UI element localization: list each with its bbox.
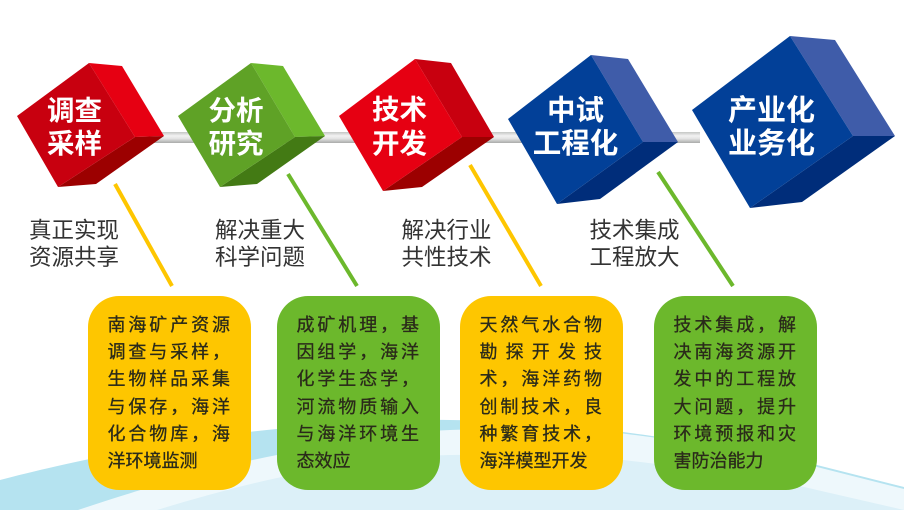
panel: 技术开发 details [460,296,623,490]
label: 解决行业共性技术 [402,218,492,270]
cube: 技术开发 [339,59,494,191]
panel: 中试工程化 details: 害防治能力 [674,451,764,471]
panel: 分析研究 details: 与海洋环境生 [296,424,419,444]
panel: 中试工程化 details: 大问题，提升 [674,397,796,417]
panel: 中试工程化 details: 发中的工程放 [674,369,796,389]
panel: 分析研究 details: 因组学，海洋 [296,342,419,362]
panel: 调查采样 details: 生物样品采集 [108,369,230,389]
cube: 中试工程化: 中试 [547,95,604,127]
cube: 中试工程化 [508,55,678,204]
cube: 调查采样: 调查 [47,95,102,126]
panel: 技术开发 details: 种繁育技术， [480,424,602,444]
label: 真正实现资源共享: 资源共享 [29,245,119,270]
cube: 中试工程化: 工程化 [533,128,618,160]
connecting gray bar [150,132,700,143]
panel: 中试工程化 details: 决南海资源开 [674,342,796,362]
label: 解决重大科学问题: 解决重大 [215,218,305,243]
panel: 调查采样 details: 洋环境监测 [108,451,198,471]
label: 技术集成工程放大: 工程放大 [590,245,680,270]
panel: 中试工程化 details: 环境预报和灾 [674,424,796,444]
panel: 调查采样 details: 与保存，海洋 [108,397,230,417]
panel: 调查采样 details: 调查与采样， [108,342,230,362]
panel: 调查采样 details: 化合物库，海 [108,424,230,444]
panel: 技术开发 details: 创制技术，良 [480,397,602,417]
cube: 调查采样 [17,63,164,187]
label: 解决行业共性技术: 解决行业 [402,218,492,243]
cube: 调查采样: 采样 [47,128,102,159]
panel: 技术开发 details: 海洋模型开发 [480,451,588,471]
cube: 产业化业务化 [692,36,895,208]
panel: 分析研究 details: 成矿机理，基 [296,314,419,334]
panel: 分析研究 details: 化学生态学， [296,369,419,389]
label: 真正实现资源共享: 真正实现 [29,218,119,243]
panel: 分析研究 details [277,296,440,490]
cube: 分析研究: 研究 [208,128,264,159]
label: 解决重大科学问题 [215,218,305,270]
panel: 技术开发 details: 勘探开发技 [480,342,602,362]
label: 解决重大科学问题: 科学问题 [215,245,305,270]
panel: 调查采样 details [88,296,251,490]
cube: 分析研究: 分析 [208,95,264,126]
panel: 分析研究 details: 态效应 [296,451,350,471]
label: 解决行业共性技术: 共性技术 [402,245,492,270]
panel: 技术开发 details: 术，海洋药物 [480,369,602,389]
panel: 调查采样 details: 南海矿产资源 [108,314,230,334]
label: 技术集成工程放大 [590,218,680,270]
cube: 技术开发: 技术 [372,94,427,125]
cube: 产业化业务化: 产业化 [728,94,815,127]
panel: 中试工程化 details: 技术集成，解 [674,314,796,334]
panel: 技术开发 details: 天然气水合物 [480,314,602,334]
panel: 中试工程化 details [654,296,817,490]
cube: 产业化业务化: 业务化 [728,127,815,160]
label: 技术集成工程放大: 技术集成 [590,218,680,243]
panel: 分析研究 details: 河流物质输入 [296,397,419,417]
cube: 分析研究 [178,63,325,187]
cube: 技术开发: 开发 [372,128,427,159]
label: 真正实现资源共享 [29,218,119,270]
